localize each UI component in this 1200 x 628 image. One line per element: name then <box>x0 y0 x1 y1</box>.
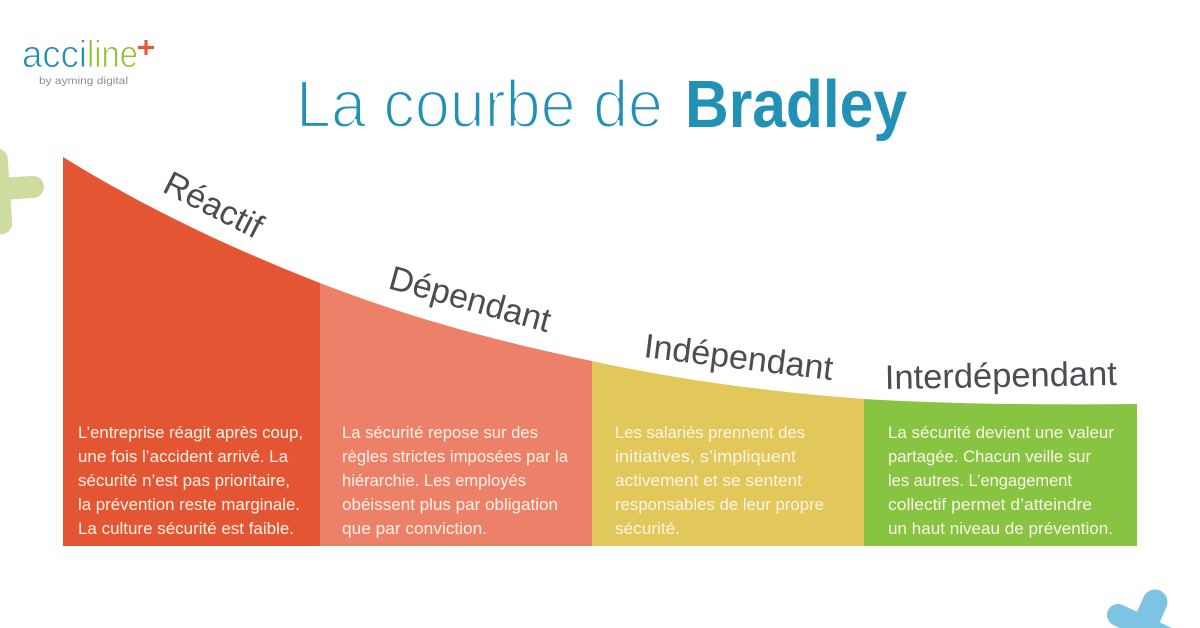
panel: Dépendant <box>320 259 592 546</box>
title: Bradley <box>685 67 907 142</box>
description: Indépendant: activement et se sentent <box>615 472 802 490</box>
label: Dépendant: Dépendant <box>385 259 556 340</box>
logo: acciline: by ayming digital <box>39 75 128 87</box>
description: Interdépendant: La sécurité devient une valeur <box>888 424 1115 442</box>
description: Interdépendant: collectif permet d’atteindre <box>888 496 1092 514</box>
panel: Réactif <box>63 157 320 546</box>
description: Dépendant: hiérarchie. Les employés <box>342 472 526 490</box>
description: Indépendant: initiatives, s’impliquent <box>615 448 796 466</box>
icon: green plus decoration <box>0 148 45 236</box>
description: Réactif: La culture sécurité est faible. <box>78 520 294 538</box>
description: Réactif: une fois l’accident arrivé. La <box>78 448 289 466</box>
panel: Indépendant <box>592 327 864 546</box>
description: Réactif: sécurité n’est pas prioritaire, <box>78 472 290 490</box>
description: Dépendant: que par conviction. <box>342 520 487 538</box>
label: Réactif: Réactif <box>157 164 270 246</box>
icon: blue cross decoration <box>1118 602 1180 628</box>
description: Réactif: L’entreprise réagit après coup, <box>78 424 303 442</box>
description: Dépendant: règles strictes imposées par la <box>342 448 569 466</box>
description: Dépendant: La sécurité repose sur des <box>342 424 538 442</box>
logo: acciline <box>22 34 154 87</box>
description: Interdépendant: partagée. Chacun veille sur <box>888 448 1092 466</box>
description: Interdépendant: les autres. L’engagement <box>888 472 1072 490</box>
label: Indépendant: Indépendant <box>642 327 836 388</box>
description: Indépendant: Les salariés prennent des <box>615 424 805 442</box>
description: Dépendant: obéissent plus par obligation <box>342 496 558 514</box>
logo: acciline: line <box>87 34 138 76</box>
panel: Interdépendant <box>864 355 1137 546</box>
description: Réactif: la prévention reste marginale. <box>78 496 300 514</box>
description: Indépendant: responsables de leur propre <box>615 496 824 514</box>
label: Interdépendant: Interdépendant <box>884 355 1118 397</box>
description: Interdépendant: un haut niveau de prévention. <box>888 520 1113 538</box>
title: La courbe de <box>296 67 663 142</box>
logo: acciline: acci <box>22 34 87 76</box>
description: Indépendant: sécurité. <box>615 520 680 538</box>
title <box>296 67 907 142</box>
